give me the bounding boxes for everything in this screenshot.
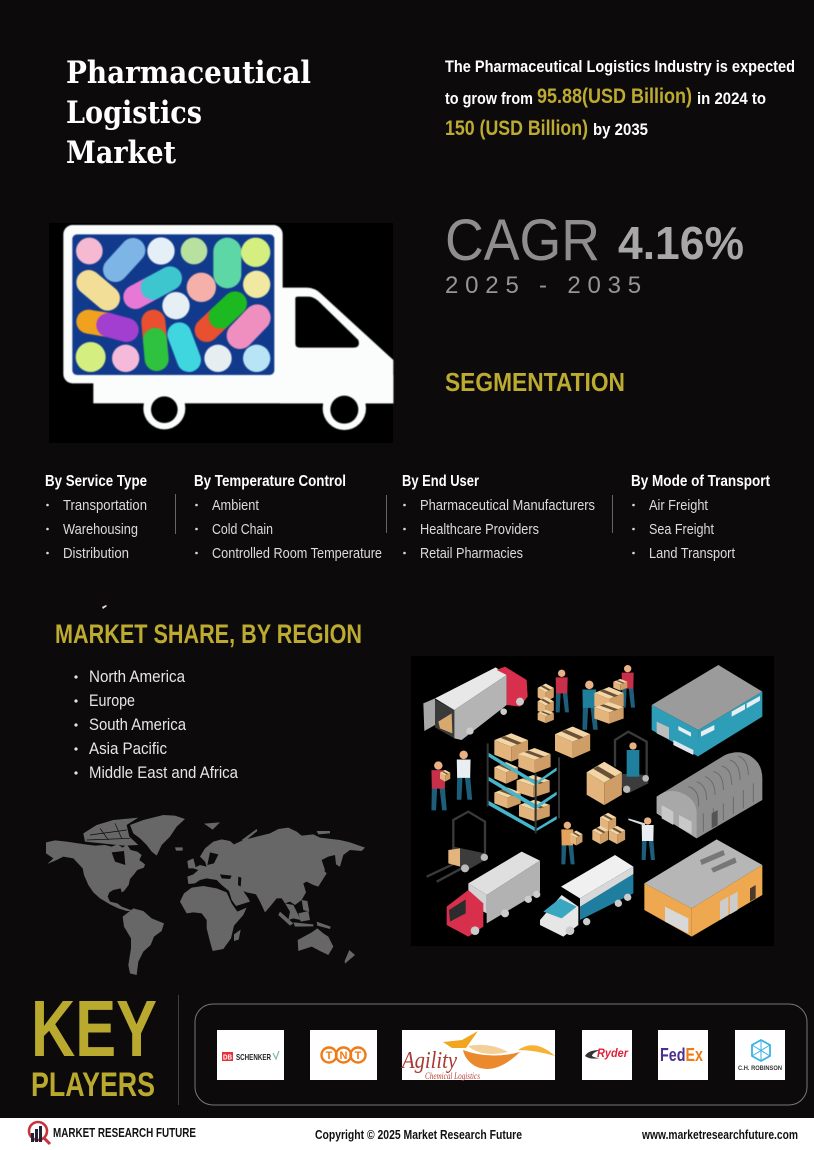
truck body	[63, 225, 393, 430]
logo: TNT: N	[340, 1050, 348, 1062]
title	[66, 55, 311, 171]
column: by temperature control: By Temperature Control	[194, 473, 346, 490]
logo: DB Schenker: SCHENKER	[236, 1052, 271, 1062]
column: by end user: Healthcare Providers	[420, 522, 539, 538]
logo: FedEx: FedEx	[660, 1045, 703, 1065]
region list: Asia Pacific	[89, 739, 167, 758]
CAGR: 2025 - 2035	[445, 272, 648, 299]
pills	[88, 250, 257, 360]
world map	[46, 815, 365, 975]
heading: key players: PLAYERS	[31, 1066, 155, 1104]
market size summary: by 2035	[593, 120, 648, 139]
heading: segmentation: SEGMENTATION	[445, 367, 625, 397]
column: by service type: Transportation	[63, 498, 147, 514]
panel: key player logos	[195, 1004, 807, 1105]
region list: South America	[89, 715, 186, 734]
column: by service type	[45, 473, 147, 562]
column: by end user: Retail Pharmacies	[420, 546, 523, 562]
icon: market research future logo	[29, 1122, 50, 1144]
column: by end user	[402, 473, 595, 562]
column: by mode of transport: Air Freight	[649, 498, 708, 514]
column: by temperature control: Cold Chain	[212, 522, 273, 538]
region list: North America	[89, 667, 185, 686]
workers	[431, 665, 655, 864]
logo: Agility	[400, 1030, 555, 1081]
footer	[0, 1118, 814, 1150]
column: by temperature control: Ambient	[212, 498, 259, 514]
CAGR: CAGR	[445, 208, 600, 273]
column: by mode of transport: Land Transport	[649, 546, 735, 562]
column: by service type: Warehousing	[63, 522, 138, 538]
column: by mode of transport: Sea Freight	[649, 522, 714, 538]
illustration: logistics and warehouse	[411, 656, 774, 946]
title: Logistics	[66, 95, 202, 131]
truck: red	[447, 852, 540, 937]
title: Market	[66, 135, 177, 171]
footer: Copyright © 2025 Market Research Future	[315, 1127, 522, 1142]
market size summary	[445, 57, 795, 140]
warehouse: blue	[652, 665, 762, 757]
truck: blue	[540, 855, 633, 937]
column: by temperature control	[194, 473, 382, 562]
market size summary: 95.88(USD Billion)	[537, 85, 692, 108]
region list	[74, 667, 238, 782]
footer: MARKET RESEARCH FUTURE	[53, 1125, 196, 1140]
logo: TNT: T	[355, 1050, 362, 1062]
illustration: pill delivery truck	[49, 223, 393, 443]
column: by service type: By Service Type	[45, 473, 147, 490]
market size summary: 150 (USD Billion)	[445, 117, 588, 140]
logo: TNT: T	[326, 1050, 333, 1062]
market size summary: to grow from	[445, 89, 533, 108]
logo: FedEx	[658, 1030, 708, 1080]
truck: open container	[423, 667, 528, 740]
logo: C.H. Robinson	[735, 1030, 785, 1080]
column: by end user: Pharmaceutical Manufacturers	[420, 498, 595, 514]
logo: TNT	[310, 1030, 377, 1080]
warehouse: orange	[644, 839, 762, 937]
logo: Ryder	[582, 1030, 632, 1080]
title: Pharmaceutical	[66, 55, 311, 91]
logo: Ryder: Ryder	[597, 1046, 629, 1060]
column: by mode of transport	[631, 473, 771, 562]
CAGR: 4.16%	[618, 217, 744, 269]
warehouse: quonset	[657, 752, 762, 838]
logo: C.H. Robinson: C.H. ROBINSON	[738, 1065, 782, 1072]
forklifts	[427, 732, 649, 882]
column: by end user: By End User	[402, 473, 479, 490]
logo: Agility: Chemical Logistics	[425, 1071, 480, 1081]
region list: Europe	[89, 691, 135, 710]
column: by temperature control: Controlled Room Temperature	[212, 546, 382, 562]
region list: Middle East and Africa	[89, 763, 238, 782]
column: by mode of transport: By Mode of Transport	[631, 473, 771, 490]
logo: DB Schenker: DB	[223, 1054, 232, 1062]
heading: key players	[31, 984, 157, 1104]
heading: market share by region: MARKET SHARE, BY REGION	[55, 619, 362, 649]
shelving with boxes	[488, 733, 559, 833]
CAGR	[445, 208, 744, 299]
logo: Agility: Agility	[400, 1048, 457, 1074]
column: by service type: Distribution	[63, 546, 129, 562]
heading: key players: KEY	[31, 984, 157, 1073]
logo: DB Schenker	[217, 1030, 284, 1080]
pallets	[440, 679, 627, 846]
market size summary: in 2024 to	[697, 89, 766, 108]
